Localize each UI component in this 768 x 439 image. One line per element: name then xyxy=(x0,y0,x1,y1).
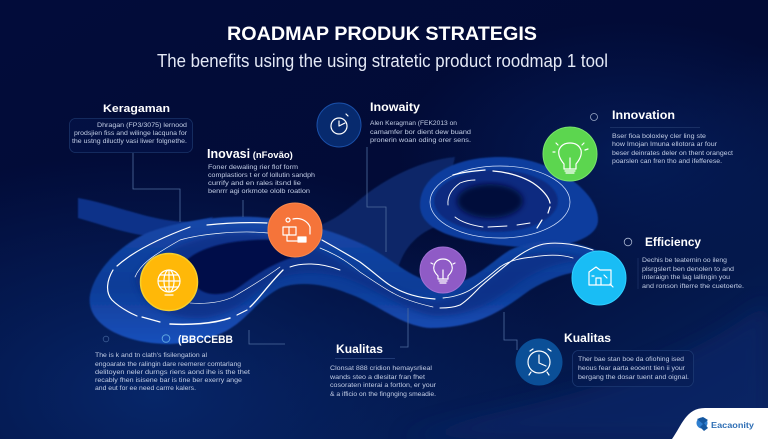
heading: Efficiency: Efficiency xyxy=(645,237,702,249)
body text: the ustng diluctly vasi liwer folgnethe. xyxy=(72,139,187,145)
body text: and eut for ee need carrre kalers. xyxy=(95,386,196,392)
icon: boxes and gear xyxy=(283,218,310,242)
panel: Kualitas center xyxy=(329,342,436,398)
connector lines xyxy=(133,147,517,350)
heading: Innovation: Innovation xyxy=(612,110,675,122)
heading: Kualitas: Kualitas xyxy=(336,342,383,356)
body text: Dechis be teaternin oo ileng xyxy=(642,258,727,264)
icon: light bulb xyxy=(431,259,455,283)
heading: BBCCEBB: (BBCCEBB xyxy=(178,334,233,346)
body text: poarslen can fren tho and ifefferese. xyxy=(612,159,722,165)
body text: Alen Keragman (FEK2013 on xyxy=(370,121,457,127)
heading: Inowaity: Inowaity xyxy=(370,102,421,114)
road: ribbon inner shade xyxy=(135,233,600,318)
body text: beser deinrates deler on thent orangect xyxy=(612,151,733,157)
body text xyxy=(72,123,187,145)
title: ROADMAP PRODUK STRATEGIS xyxy=(227,23,537,45)
icon: ring marker xyxy=(162,335,170,342)
subtitle: The benefits using the using stratetic product roodmap 1 tool xyxy=(157,51,608,71)
body text xyxy=(95,353,250,392)
rule xyxy=(610,126,700,128)
icon: alarm clock badge xyxy=(516,338,562,386)
node: cyan efficiency xyxy=(572,251,626,305)
body text: heous fear aarta eooent tien ii your xyxy=(578,366,685,372)
body text: Foner dewaling rier flof form xyxy=(208,165,298,171)
body text: and ronson ifterre the cuetoerte. xyxy=(642,284,744,290)
body text xyxy=(612,134,733,165)
body text: The is k and tn clath's fisilengation al xyxy=(95,353,207,359)
body text: delitoyen neler durngs riens aond ihe is the thet xyxy=(95,370,250,376)
body text: pronerin woan oding orer sens. xyxy=(370,138,471,144)
panel: Inowaity xyxy=(317,102,471,147)
panel: Inovasi xyxy=(207,147,315,195)
body text: Ther bae stan boe da ofiohing ised xyxy=(578,357,684,363)
node: orange strategy xyxy=(268,203,322,257)
body text: benrrr agi orkmote ololb roatlon xyxy=(208,189,310,195)
body text xyxy=(329,366,436,398)
road: oval loop xyxy=(420,157,598,248)
body text: interaign the lag lallingin you xyxy=(642,275,730,281)
rule xyxy=(637,258,639,289)
body text xyxy=(578,357,689,381)
panel: Efficiency xyxy=(624,237,744,290)
body text: Dhragan (FP3/3075) lernood xyxy=(97,123,187,129)
text box xyxy=(572,350,694,386)
icon: small marker xyxy=(624,238,632,246)
body text: plsrgslert ben denolen to and xyxy=(642,267,734,273)
road: upper right ribbon tail xyxy=(318,157,455,268)
panel: BBCCEBB xyxy=(95,334,250,392)
body text: prodsjien fiss and wilinge lacquna for xyxy=(74,131,187,137)
icon: house map xyxy=(589,267,613,287)
body text: complastiors t er of lollutin sandph xyxy=(208,173,315,179)
panel: Innovation xyxy=(590,110,733,165)
body text xyxy=(370,121,471,144)
body text: bergang the dosar tuent and oignal. xyxy=(578,375,689,381)
body text xyxy=(642,258,744,290)
body text: Clonsat 888 cridion hemaysrlieal xyxy=(330,366,432,372)
body text: wands steo a dlesitar fran fhet xyxy=(329,375,425,381)
body text: camamfer bor dient dew buand xyxy=(370,130,471,136)
icon: light bulb xyxy=(553,143,588,173)
icon: globe xyxy=(158,270,180,295)
body text: currify and en rales itsnd lie xyxy=(208,181,302,187)
text box xyxy=(70,118,192,152)
road: upper left ribbon tail xyxy=(78,198,213,236)
body text: engoarate the ralingin dare reemerer comtarlang xyxy=(95,362,241,368)
logo badge xyxy=(672,408,768,439)
road: inner hollow xyxy=(185,240,302,294)
body text xyxy=(208,165,315,195)
heading: Keragaman: Keragaman xyxy=(103,103,170,115)
panel: Kualitas right xyxy=(516,333,694,386)
heading: Inovasi: Inovasi (nFovão) xyxy=(207,147,293,161)
body text: & a ifficio on the fingnging smeadie. xyxy=(330,392,436,398)
node: green innovation xyxy=(543,127,597,181)
logo text: Eacaonity xyxy=(711,421,755,430)
winding roadmap road xyxy=(78,157,600,344)
body text: recably fhen isisene bar is tine ber exerry ange xyxy=(95,378,243,384)
icon: small marker xyxy=(590,114,598,120)
panel: Keragaman xyxy=(70,103,192,152)
body text: Bser fioa boloxley cler ling ste xyxy=(612,134,707,140)
body text: how Imojan Imuna ellotora ar four xyxy=(612,142,717,148)
heading: Kualitas: Kualitas xyxy=(564,333,611,345)
body text: cosoraten interai a fortlon, er your xyxy=(330,383,436,389)
rule xyxy=(335,358,395,360)
icon: small marker xyxy=(103,336,109,342)
icon: logo mark xyxy=(696,417,708,431)
road: white lane markings xyxy=(108,166,593,324)
node: purple idea xyxy=(420,247,466,293)
node: yellow globe xyxy=(140,254,198,310)
icon: clock badge xyxy=(317,103,361,147)
road: main ribbon xyxy=(90,217,600,344)
